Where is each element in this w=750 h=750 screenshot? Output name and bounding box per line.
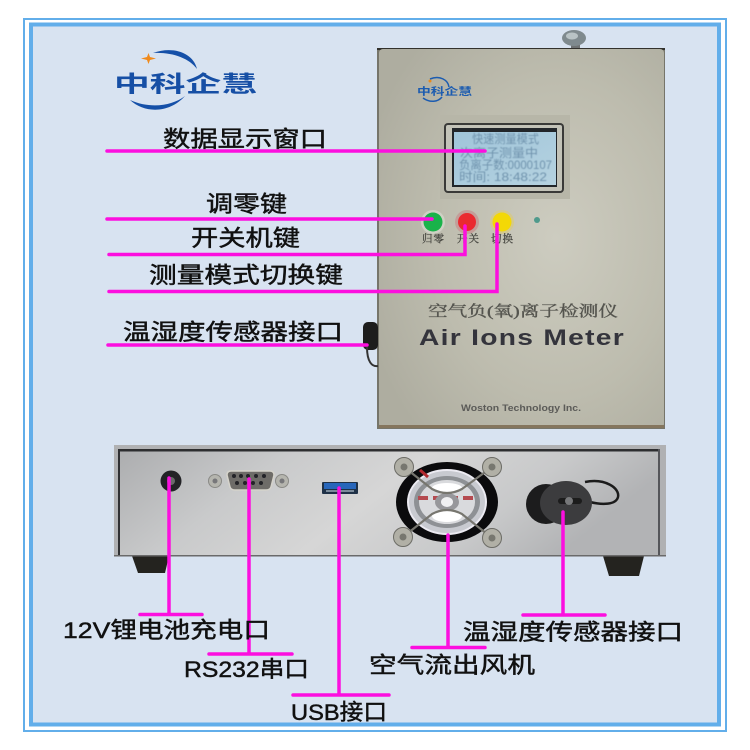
label: 12V charging port: 12V锂电池充电口 xyxy=(63,618,270,643)
button captions xyxy=(422,232,514,245)
small logo on panel: 中科企慧 xyxy=(417,85,472,98)
DC charge port xyxy=(160,470,182,492)
button captions: 归零 xyxy=(422,232,444,245)
side sensor connector xyxy=(363,322,378,366)
label: fan: 空气流出风机 xyxy=(369,653,536,678)
front device panel xyxy=(363,30,665,429)
green zero button xyxy=(421,210,445,234)
button captions: 切换 xyxy=(491,232,514,245)
manufacturer: Woston Technology Inc. xyxy=(461,403,581,413)
rear device panel xyxy=(114,445,666,576)
antenna screw xyxy=(562,30,586,49)
label: rear sensor port: 温湿度传感器接口 xyxy=(463,620,683,645)
logo: top left brand xyxy=(114,50,257,110)
panel English title: Air Ions Meter xyxy=(419,325,625,350)
panel Chinese title: 空气负(氧)离子检测仪 xyxy=(428,302,618,320)
line: mode key xyxy=(109,224,497,292)
USB port xyxy=(322,482,358,494)
LCD data display: 次离子测量中 xyxy=(460,145,538,160)
LCD data display: 负离子数:0000107 xyxy=(459,157,552,172)
line: power key xyxy=(109,226,465,254)
line: zero key xyxy=(107,217,432,221)
line: USB xyxy=(293,488,389,695)
label: RS232 port: RS232串口 xyxy=(184,657,309,682)
LCD data display: 快速测量模式 xyxy=(472,132,539,146)
callout lines xyxy=(107,151,605,695)
fan xyxy=(394,458,502,548)
button captions: 开关 xyxy=(457,233,480,245)
LCD data display xyxy=(440,115,570,199)
label: data window: 数据显示窗口 xyxy=(163,127,327,152)
label: zero key: 调零键 xyxy=(206,192,287,217)
line: data display xyxy=(107,149,485,153)
label: power key: 开关机键 xyxy=(191,226,300,251)
logo: top left brand: 中科企慧 xyxy=(114,72,257,97)
feet xyxy=(132,556,644,576)
line: RS232 xyxy=(209,479,292,654)
label: side sensor port: 温湿度传感器接口 xyxy=(123,320,343,345)
rear casing xyxy=(114,445,666,556)
red power button xyxy=(455,210,479,234)
line: 12V port xyxy=(140,478,202,614)
LCD data display: 时间: 18:48:22 xyxy=(459,170,547,184)
label: USB port: USB接口 xyxy=(291,700,387,725)
indicator LED xyxy=(534,217,540,223)
yellow mode button xyxy=(490,210,514,234)
line: rear sensor xyxy=(523,512,605,615)
RS232 connector xyxy=(208,471,288,490)
line: fan xyxy=(412,535,485,648)
rear sensor connector xyxy=(526,481,618,525)
line: side sensor xyxy=(108,343,367,347)
device body xyxy=(377,48,665,429)
label: mode switch key: 测量模式切换键 xyxy=(149,263,343,288)
small logo on panel xyxy=(417,78,472,101)
buttons xyxy=(421,210,540,245)
